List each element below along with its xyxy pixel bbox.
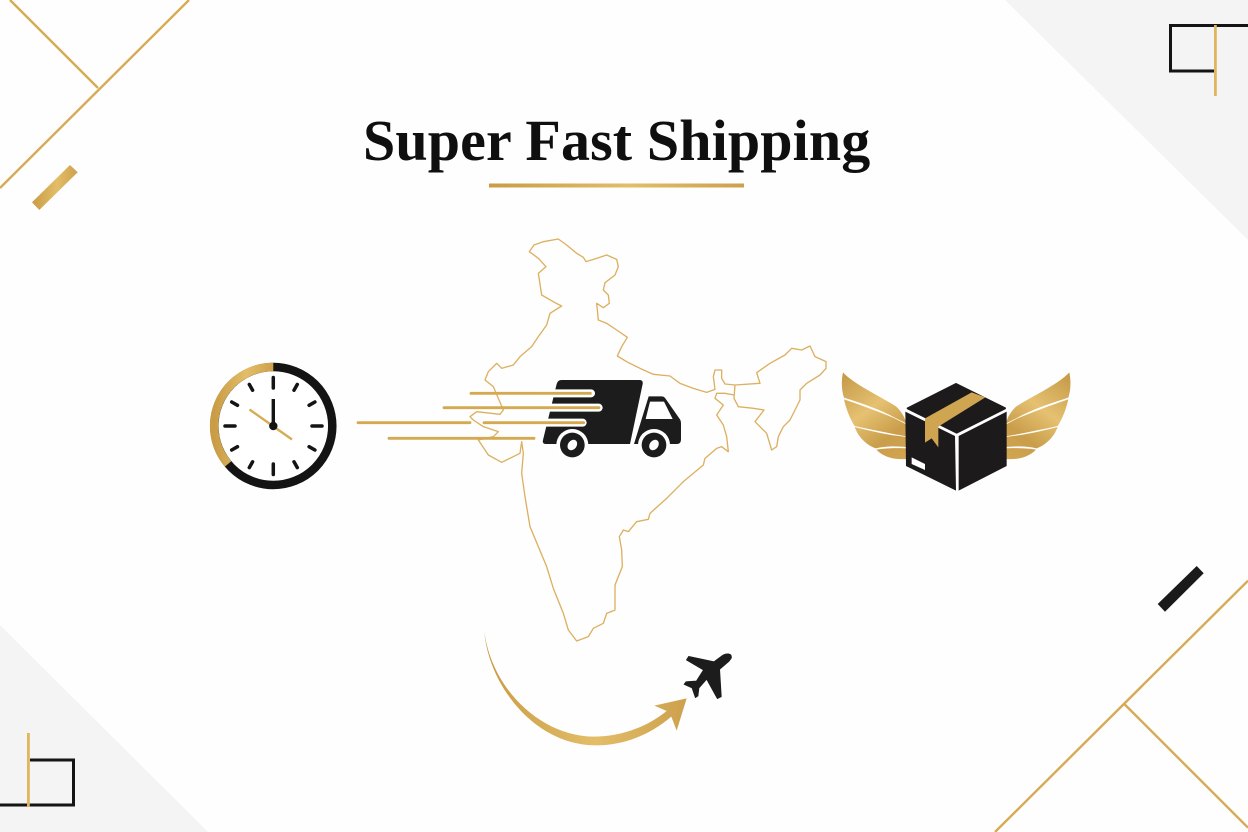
truck body (543, 380, 643, 444)
left wing (842, 372, 906, 459)
map of India outline (470, 239, 826, 641)
top-right corner decoration (1005, 0, 1248, 240)
box tape (925, 392, 985, 447)
speed line cutouts (540, 393, 599, 423)
title underline (489, 184, 744, 188)
box label (912, 457, 925, 470)
truck window (646, 402, 673, 419)
top-left corner decoration (0, 0, 189, 210)
truck cab (634, 396, 681, 444)
gold arc on clock (214, 367, 273, 464)
icon: airplane (684, 654, 732, 699)
curved arrow (484, 632, 687, 745)
speed lines (358, 393, 599, 438)
icon: delivery truck with speed lines (358, 380, 681, 461)
truck wheels (556, 429, 670, 461)
box faces (905, 384, 1007, 491)
bottom-right corner decoration (995, 566, 1248, 832)
bottom-left corner decoration (0, 625, 208, 832)
title: Super Fast Shipping (363, 108, 870, 173)
icon: clock (214, 367, 332, 485)
clock hands (250, 399, 292, 440)
icon: parcel box (905, 384, 1007, 491)
right wing (1006, 372, 1070, 459)
